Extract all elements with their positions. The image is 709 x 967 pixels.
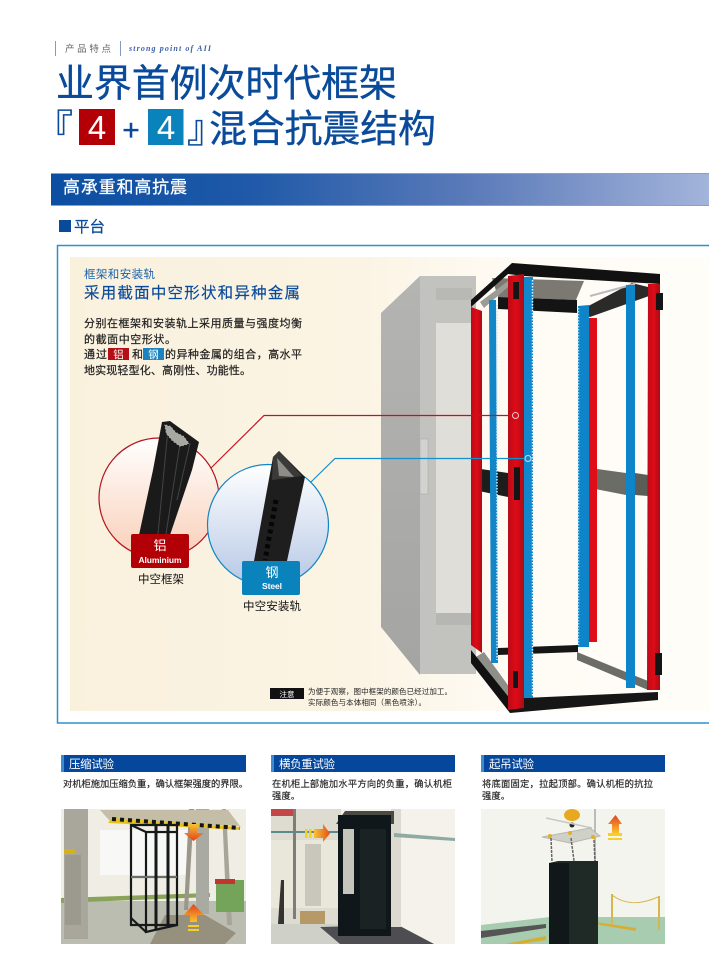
label: aluminium: Aluminium — [138, 555, 182, 565]
title badge: blue 4 — [148, 109, 184, 146]
description: lateral load: 在机柜上部施加水平方向的负重，确认机柜 — [272, 778, 452, 789]
description: lateral load — [272, 778, 452, 801]
heading: lifting: 起吊试验 — [489, 757, 534, 771]
rack: steel rails, back — [489, 285, 635, 688]
caption: hollow rail: 中空安装轨 — [243, 599, 302, 613]
panel body text: 钢 — [148, 348, 159, 361]
photo: compression — [61, 809, 246, 944]
note: 为便于观察，图中框架的颜色已经过加工。 — [308, 686, 452, 696]
title: + — [122, 114, 140, 147]
heading: lifting — [481, 755, 665, 772]
sling rig — [542, 809, 600, 862]
caption: hollow frame: 中空框架 — [138, 572, 184, 586]
panel heading: 采用截面中空形状和异种金属 — [84, 284, 300, 302]
heading: compression — [61, 755, 246, 772]
label: aluminium — [131, 534, 189, 568]
black cabinet — [549, 861, 598, 944]
heading: lateral load — [271, 755, 455, 772]
test: lateral load — [271, 755, 455, 944]
title — [35, 64, 436, 151]
grey cabinet ghost — [381, 276, 476, 675]
section label — [55, 41, 212, 56]
circle: aluminium — [99, 421, 219, 586]
heading: compression: 压缩试验 — [69, 757, 114, 771]
arrow: press up — [184, 904, 204, 922]
panel body text: 和 — [132, 348, 143, 361]
aluminium extrusion — [139, 421, 199, 535]
arrow: push right — [305, 824, 330, 842]
arrow: lift up — [608, 815, 622, 840]
arrow: press down — [184, 824, 204, 841]
panel body text — [84, 316, 302, 377]
note: 实际颜色与本体相同（黑色喷涂）。 — [308, 697, 426, 707]
panel body text: 分别在框架和安装轨上采用质量与强度均衡 — [84, 316, 302, 330]
title badge: blue 4: 4 — [157, 109, 175, 146]
rack: steel rail, front — [524, 277, 533, 698]
label: steel — [242, 561, 300, 595]
panel body text: 地实现轻型化、高刚性、功能性。 — [84, 363, 251, 377]
title: 』 — [187, 109, 225, 151]
panel body text: 铝 — [113, 348, 124, 361]
section label: 产品特点 — [65, 43, 111, 55]
section label: strong point of AII — [128, 44, 212, 53]
panel body text: 的截面中空形状。 — [84, 332, 176, 346]
heading band: 高承重和高抗震 — [63, 178, 187, 197]
title badge: red 4: 4 — [88, 109, 106, 146]
description: compression: 对机柜施加压缩负重，确认框架强度的界限。 — [63, 778, 248, 789]
note — [270, 686, 452, 707]
note: 注意 — [280, 689, 294, 699]
panel: platform — [58, 246, 709, 723]
subheading: 平台 — [74, 218, 105, 236]
description: lifting: 将底面固定，拉起顶部。确认机柜的抗拉 — [482, 778, 653, 789]
photo: lifting — [481, 809, 665, 944]
title: 『 — [35, 109, 73, 151]
label: steel: Steel — [262, 581, 282, 591]
heading band — [51, 173, 709, 206]
panel heading — [84, 267, 300, 302]
rack: steel rail, inner right — [578, 305, 589, 647]
panel body text: 通过 — [84, 348, 107, 361]
label: steel: 钢 — [265, 565, 279, 580]
rack: aluminium posts, back — [471, 284, 660, 690]
rack: cross braces — [474, 468, 648, 497]
title: 混合抗震结构 — [209, 109, 436, 151]
test: lifting — [481, 755, 665, 944]
steel rail — [254, 451, 305, 561]
rack frame — [471, 263, 663, 713]
description: lateral load: 强度。 — [272, 790, 300, 801]
title: 业界首例次时代框架 — [56, 64, 397, 106]
title badge: red 4 — [79, 109, 115, 146]
subheading — [59, 218, 105, 236]
leader lines — [211, 412, 531, 482]
small cabinet frame — [131, 825, 177, 932]
heading: lateral load: 横负重试验 — [279, 757, 336, 771]
rack: hinges — [513, 282, 663, 688]
rack: top frame — [471, 263, 660, 317]
panel body text: 的异种金属的组合，高水平 — [165, 347, 302, 361]
description: lifting: 强度。 — [482, 790, 510, 801]
label: aluminium: 铝 — [153, 538, 167, 553]
description: lifting — [482, 778, 653, 801]
circle: steel — [208, 451, 328, 613]
rack: bottom frame — [471, 645, 658, 713]
test: compression — [61, 755, 248, 944]
rack: aluminium post, front — [508, 274, 524, 710]
black cabinet — [336, 811, 394, 936]
panel heading: 框架和安装轨 — [84, 267, 156, 281]
photo: lateral load — [271, 809, 455, 944]
